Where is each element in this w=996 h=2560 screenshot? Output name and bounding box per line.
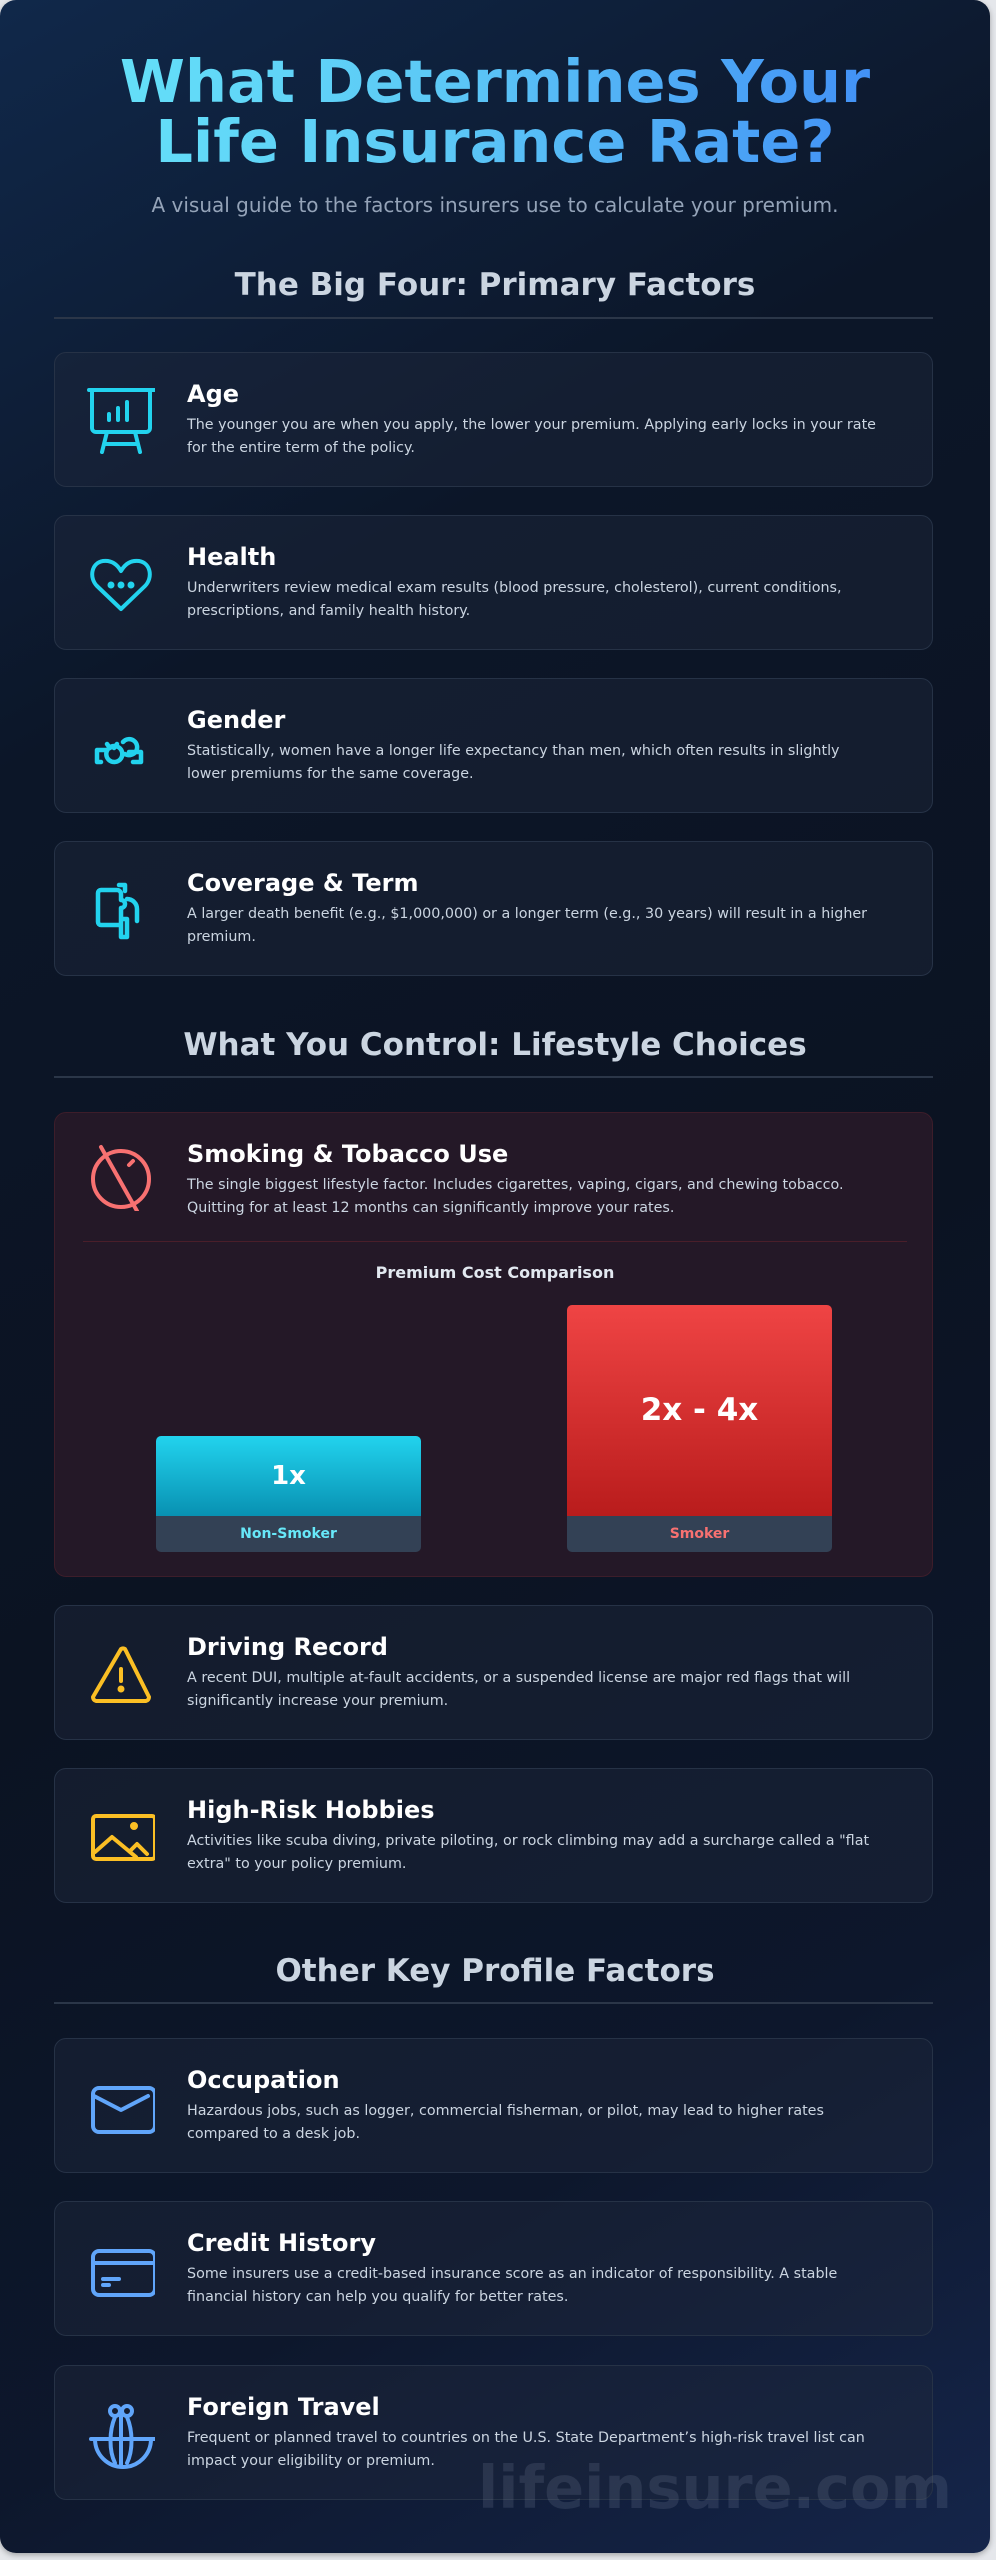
text: driving: significantly increase your premium. [187,1693,448,1709]
heading: coverage: Coverage & Term [187,869,418,897]
text: hobbies: extra" to your policy premium. [187,1856,406,1872]
icon: document [96,882,140,940]
heading: age: Age [187,380,239,408]
text: hobbies: Activities like scuba diving, private piloting, or rock climbing may add a surcharge called a "flat [187,1833,869,1849]
bar: smoker: Smoker [670,1526,729,1542]
panel: driving [54,1605,933,1740]
text: gender: lower premiums for the same coverage. [187,766,474,782]
icon: gender [94,736,144,764]
heading: hobbies: High-Risk Hobbies [187,1796,435,1824]
icon: envelope [91,2086,155,2134]
text: occupation: Hazardous jobs, such as logger, commercial fisherman, or pilot, may lead to higher rates [187,2103,824,2119]
text: coverage: A larger death benefit (e.g., $1,000,000) or a longer term (e.g., 30 years) will result in a higher [187,906,867,922]
panel: credit [54,2201,933,2336]
text: occupation [187,2103,824,2142]
text: smoking [186,1177,844,1216]
text: smoking: Quitting for at least 12 months can significantly improve your rates. [187,1200,674,1216]
text: driving: A recent DUI, multiple at-fault accidents, or a suspended license are major red flags that will [187,1670,850,1686]
subtitle: A visual guide to the factors insurers use to calculate your premium. [151,193,839,217]
heading: driving: Driving Record [187,1633,388,1661]
heading: smoking: Smoking & Tobacco Use [187,1140,508,1168]
panel: smoking [54,1112,933,1577]
heading: foreign travel: Foreign Travel [187,2393,380,2421]
section heading: big four: The Big Four: Primary Factors [235,267,755,303]
icon: presentation chart [87,388,155,454]
icon: image [91,1814,155,1861]
text: gender: Statistically, women have a longer life expectancy than men, which often results in slightly [187,743,840,759]
text: foreign travel: Frequent or planned travel to countries on the U.S. State Department’s high-risk travel list can [187,2430,865,2446]
icon: heart [90,558,152,612]
text: credit: financial history can help you qualify for better rates. [187,2289,568,2305]
panel: hobbies [54,1768,933,1903]
heading: credit: Credit History [187,2229,376,2257]
heading: gender: Gender [187,706,285,734]
text: hobbies [187,1833,869,1872]
text: occupation: compared to a desk job. [187,2126,360,2142]
icon: warning [91,1646,151,1703]
bar: smoker [567,1305,832,1552]
bar: non-smoker [156,1436,421,1552]
chart: premium cost comparison [156,1263,832,1552]
bar: non-smoker: 1x [271,1461,306,1491]
title [0,52,990,172]
text: credit [187,2266,837,2305]
icon: no smoking [91,1144,151,1211]
panel: foreign travel [54,2365,933,2500]
panel: coverage [54,841,933,976]
text: foreign travel: impact your eligibility or premium. [187,2453,435,2469]
title: Life Insurance Rate? [155,107,835,176]
section heading: lifestyle: What You Control: Lifestyle Choices [183,1027,807,1063]
text: coverage [187,906,867,945]
panel: age [54,352,933,487]
title: What Determines Your [120,47,870,116]
text: gender [187,743,840,782]
bar: smoker: 2x - 4x [641,1392,758,1428]
text: age: The younger you are when you apply, the lower your premium. Applying early locks in your rate [187,417,876,433]
panel: health [54,515,933,650]
text: smoking: The single biggest lifestyle factor. Includes cigarettes, vaping, cigars, and chewing tobacco. [187,1177,844,1193]
watermark: lifeinsure.com [478,2453,952,2522]
text: coverage: premium. [187,929,256,945]
chart title: Premium Cost Comparison [376,1263,614,1282]
panel: gender [54,678,933,813]
text: age [186,417,876,456]
text: credit: Some insurers use a credit-based insurance score as an indicator of responsibility. A stable [187,2266,837,2282]
text: age: for the entire term of the policy. [187,440,415,456]
icon: credit card [91,2249,155,2297]
text: health: Underwriters review medical exam results (blood pressure, cholesterol), current conditions, [187,580,842,596]
text: health [187,580,842,619]
bar: non-smoker: Non-Smoker [240,1526,337,1542]
panel: occupation [54,2038,933,2173]
icon: globe [89,2404,155,2469]
heading: health: Health [187,543,276,571]
heading: occupation: Occupation [187,2066,340,2094]
text: driving [187,1670,850,1709]
text: health: prescriptions, and family health history. [187,603,470,619]
text: foreign travel [187,2430,865,2469]
section heading: other: Other Key Profile Factors [275,1953,715,1989]
